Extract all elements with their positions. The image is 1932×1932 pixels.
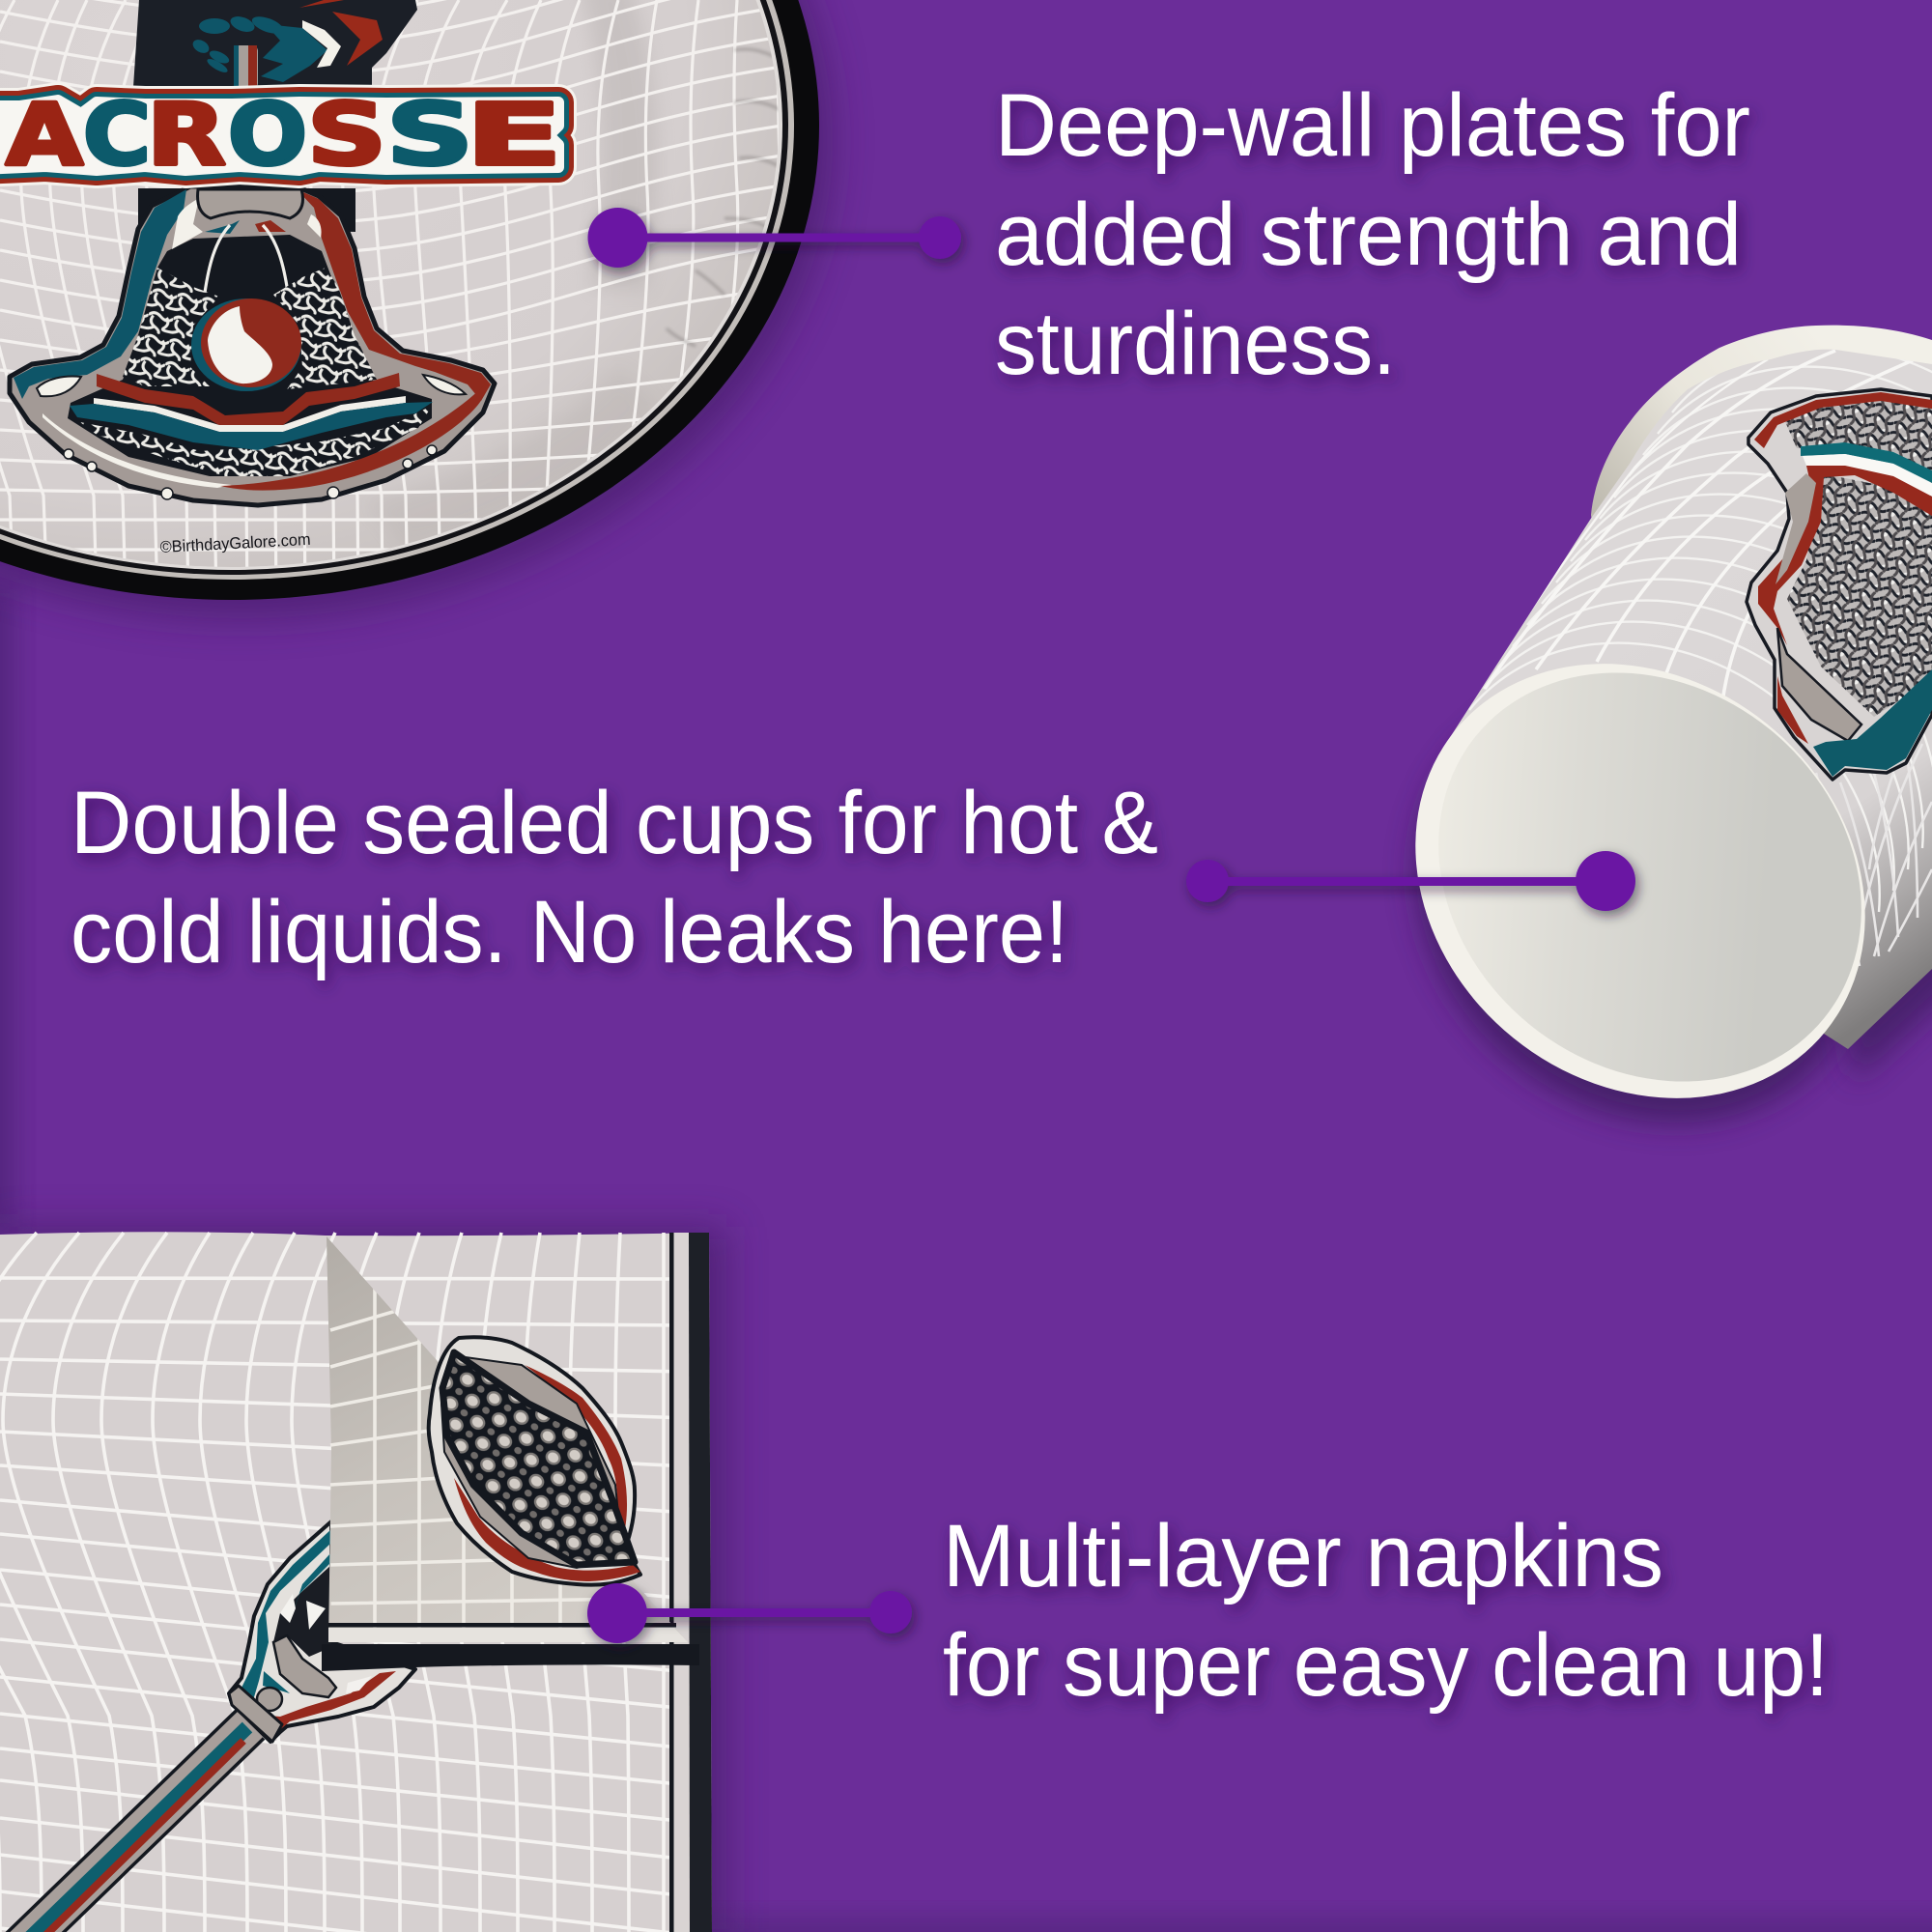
glove and stick top	[133, 0, 417, 89]
lacrosse head on cup	[1747, 389, 1932, 780]
napkin: multi-layer napkin	[0, 1227, 726, 1932]
stick head	[229, 1521, 415, 1742]
text: plates: sturdiness.	[995, 295, 1396, 393]
LACROSSE wordmark: O	[228, 85, 307, 185]
folded flap	[327, 1236, 688, 1642]
stick collar	[229, 1686, 282, 1742]
plate surface with warped grid	[0, 0, 802, 599]
text: napkins	[943, 1507, 1829, 1715]
LACROSSE wordmark: R	[147, 85, 226, 185]
text: cups	[71, 774, 1158, 981]
callout: cup	[1186, 851, 1635, 911]
napkin black border	[669, 1233, 712, 1932]
flap back strip	[322, 1644, 699, 1671]
head silhouette	[10, 186, 495, 505]
cup: double sealed cup	[1403, 325, 1932, 1136]
cup body with grid	[1430, 328, 1932, 1063]
LACROSSE wordmark: A	[6, 85, 83, 185]
LACROSSE wordmark	[0, 85, 562, 185]
LACROSSE wordmark: C	[83, 85, 151, 185]
net	[442, 1352, 635, 1565]
stick shaft	[0, 1724, 250, 1932]
text: cups: Double sealed cups for hot &	[71, 774, 1158, 872]
copyright on plate: ©BirthdayGalore.com	[159, 530, 311, 556]
LACROSSE wordmark: E	[466, 85, 562, 185]
napkin warped grid	[0, 1233, 688, 1932]
lacrosse stick on napkin	[0, 1521, 415, 1932]
text: cups: cold liquids. No leaks here!	[71, 883, 1068, 981]
ball-side netting	[123, 268, 219, 386]
LACROSSE wordmark: S	[386, 85, 473, 185]
ball	[191, 298, 301, 391]
callout: napkin	[587, 1583, 912, 1643]
cup rim lip	[1591, 326, 1932, 522]
plate: deep-wall paper plate	[0, 0, 833, 618]
lacrosse head print on flap	[429, 1337, 640, 1585]
callout: plate	[587, 208, 961, 268]
cup base	[1328, 574, 1932, 1188]
text: plates: Deep-wall plates for	[995, 76, 1750, 175]
text: plates	[995, 76, 1750, 393]
lacrosse head emblem	[10, 186, 495, 505]
text: napkins: for super easy clean up!	[943, 1616, 1829, 1715]
plate rim	[0, 0, 819, 600]
text: plates: added strength and	[995, 185, 1742, 284]
text: napkins: Multi-layer napkins	[943, 1507, 1663, 1605]
LACROSSE wordmark: S	[307, 85, 386, 185]
napkin sheet	[0, 1232, 712, 1932]
